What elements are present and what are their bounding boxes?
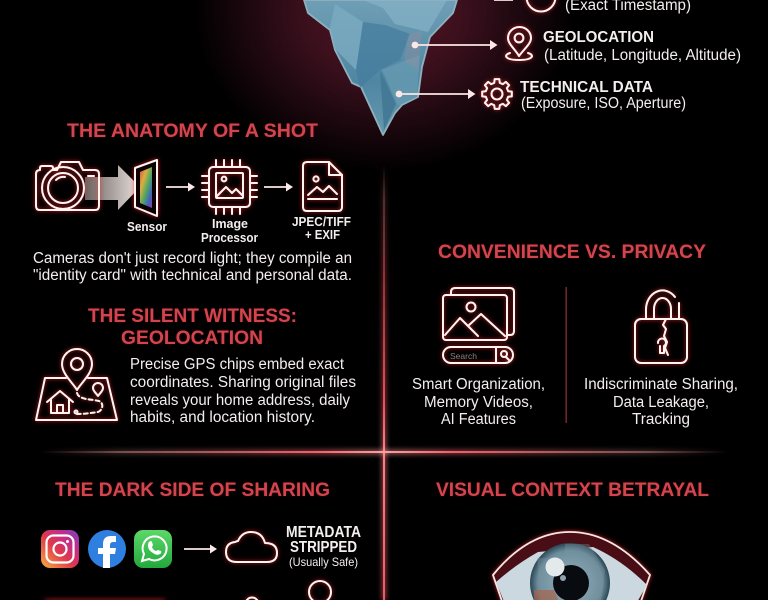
benefits list [412, 376, 545, 428]
room reflection [537, 544, 605, 600]
panel: convenience vs privacy [412, 242, 738, 428]
iris [530, 543, 610, 600]
description [130, 356, 356, 426]
iceberg [304, 0, 457, 135]
sclera [496, 547, 647, 600]
glowing cross dividers [40, 165, 728, 600]
risks list [584, 376, 738, 428]
technical data detail: (Exposure, ISO, Aperture) [521, 95, 686, 112]
benefits list: AI Features [441, 411, 516, 428]
icon: whatsapp [134, 530, 172, 568]
panel: anatomy of a shot [33, 121, 352, 284]
arrow [264, 182, 293, 192]
panel: dark side of sharing [41, 480, 361, 600]
metadata stripped label: STRIPPED [290, 539, 357, 556]
heading: THE ANATOMY OF A SHOT [67, 121, 318, 142]
panel: visual context betrayal [436, 480, 709, 600]
pupil [553, 565, 589, 600]
callout: timestamp [494, 0, 691, 14]
benefits list: Memory Videos, [424, 394, 533, 411]
processor label: Image [212, 217, 248, 231]
icon: clock [526, 0, 556, 12]
arrow to pin icon [412, 40, 498, 50]
file label: JPEC/TIFF [292, 215, 351, 229]
icon: cracked padlock [635, 290, 687, 363]
arrow [184, 544, 217, 554]
panel: silent witness [36, 306, 356, 426]
outer lid [493, 532, 650, 600]
description: coordinates. Sharing original files [130, 374, 356, 391]
arrow to gear icon [396, 89, 476, 99]
description: habits, and location history. [130, 409, 315, 426]
icon: map with pin and house [36, 349, 117, 420]
processor label: Processor [201, 231, 258, 245]
description: "identity card" with technical and personal data. [33, 267, 352, 284]
heading [88, 306, 297, 349]
arrow to clock icon [494, 0, 513, 1]
description: Precise GPS chips embed exact [130, 356, 345, 373]
geolocation heading: GEOLOCATION [543, 29, 654, 46]
search label: Search [450, 351, 477, 361]
highlight [546, 558, 564, 576]
icon: map pin [506, 27, 532, 60]
icon: sensor [135, 160, 157, 216]
heading: THE SILENT WITNESS: [88, 306, 297, 327]
icon: light beam [85, 165, 140, 210]
heading: THE DARK SIDE OF SHARING [55, 480, 330, 501]
description [33, 250, 352, 284]
metadata stripped label: (Usually Safe) [289, 555, 358, 569]
heading: CONVENIENCE VS. PRIVACY [438, 242, 706, 263]
arrow [166, 182, 195, 192]
metadata stripped label: METADATA [286, 524, 361, 541]
icon: camera [36, 162, 99, 210]
icon: eye [493, 532, 650, 600]
small highlight [560, 575, 566, 581]
partial icons at bottom edge [246, 581, 331, 600]
callout: technical data [396, 79, 686, 112]
icon: photo gallery with search bar [443, 288, 514, 363]
file label [292, 215, 351, 242]
icon: facebook [88, 530, 126, 568]
icon: gear [482, 79, 512, 109]
technical data heading: TECHNICAL DATA [520, 79, 653, 96]
sensor label: Sensor [127, 220, 167, 234]
icon: instagram [41, 530, 79, 568]
processor label [201, 217, 258, 245]
callout: geolocation [412, 27, 741, 64]
geolocation detail: (Latitude, Longitude, Altitude) [544, 47, 741, 64]
description: reveals your home address, daily [130, 392, 350, 409]
risks list: Data Leakage, [613, 394, 709, 411]
risks list: Tracking [632, 411, 690, 428]
vertical divider [566, 287, 567, 423]
file label: + EXIF [305, 228, 340, 242]
icon: image processor [202, 160, 257, 214]
icon: image file [303, 162, 342, 211]
heading: VISUAL CONTEXT BETRAYAL [436, 480, 709, 501]
heading: GEOLOCATION [121, 328, 263, 349]
description: Cameras don't just record light; they compile an [33, 250, 352, 267]
benefits list: Smart Organization, [412, 376, 545, 393]
metadata stripped label [286, 524, 361, 569]
red glow at bottom edge [45, 598, 165, 600]
icon: cloud [226, 532, 277, 562]
risks list: Indiscriminate Sharing, [584, 376, 738, 393]
reflected warm floor [534, 590, 560, 600]
